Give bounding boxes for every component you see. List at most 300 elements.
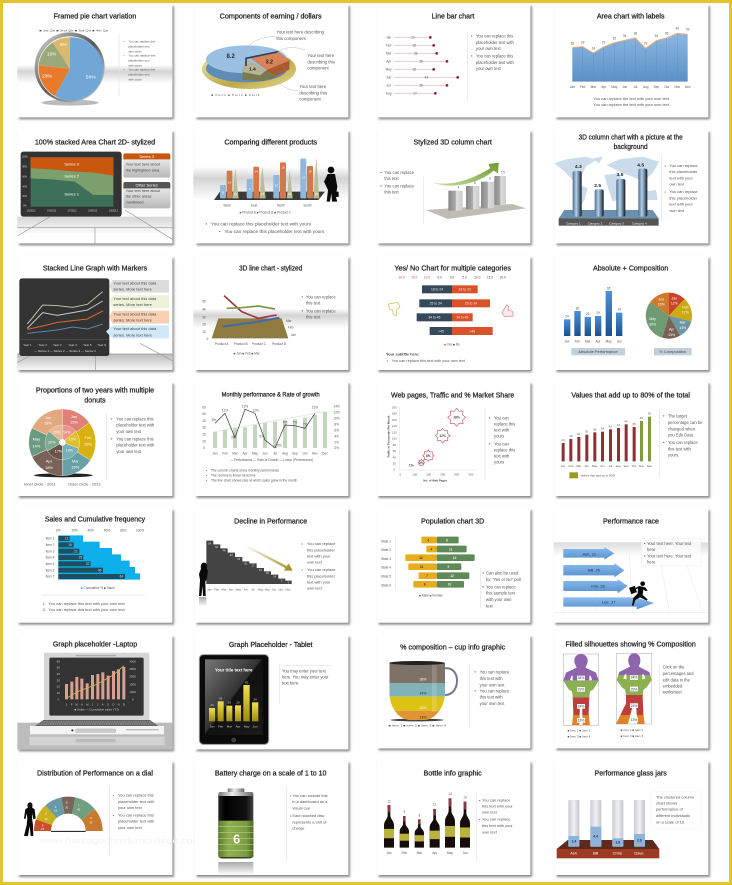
text block: tablet: text here. <box>282 680 299 685</box>
text block: callouts <box>276 30 335 102</box>
chart: glass jars: 2.4 <box>572 839 576 843</box>
chart: laptop columns: 0 <box>57 697 59 701</box>
chart: combo bars and line: 13% <box>312 406 318 410</box>
chart: area: Oct <box>664 85 669 89</box>
chart: area: 29 <box>644 42 648 46</box>
chart: bubble scatter: 400 <box>454 473 459 477</box>
chart: area: Mar <box>591 85 596 89</box>
text block: column with picture: own text <box>669 182 685 187</box>
chart: descending stairs: Oct <box>272 588 276 592</box>
chart: stacked area <box>21 152 122 217</box>
panel: absolute plus composition <box>555 256 708 370</box>
chart: cumulative stair bars: Item 7 <box>46 575 55 579</box>
icon: battery <box>218 788 253 875</box>
chart: dial: D <box>66 800 68 804</box>
chart: line bars: Aug <box>386 91 392 95</box>
chart: bubble scatter: 500 <box>469 473 474 477</box>
chart: area: 29 <box>602 41 606 45</box>
panel: components of earning <box>195 4 348 117</box>
text block: web pages: • <box>489 441 491 446</box>
chart: dial: 9 <box>90 816 92 820</box>
chart: stacked lines: Year 3 <box>53 343 62 347</box>
chart: population pyramid: State 4 <box>381 566 391 570</box>
chart: bubble scatter: 300 <box>440 473 445 477</box>
chart: donut wheel: 14% <box>63 431 71 435</box>
chart: stacked lines <box>19 278 109 356</box>
chart: 3D line: 50 <box>202 300 206 304</box>
chart: glass jars <box>557 800 659 858</box>
chart: pareto columns: Apr <box>584 464 589 468</box>
text block: 3D column left: • <box>380 170 382 175</box>
text block: population: Can also be used <box>486 571 519 576</box>
chart: composition pie: Feb <box>682 305 688 309</box>
chart: bottles: 12 <box>387 799 391 803</box>
text block: decline: You can replace <box>307 541 336 546</box>
chart: 3D columns: 5 <box>474 181 476 185</box>
chart: stacked area: 1/9/2012 <box>109 211 119 213</box>
text block: dial: your own text <box>118 805 143 810</box>
callouts: series notes: Your text about this data <box>113 311 157 316</box>
chart: population pyramid: 7 <box>426 574 428 578</box>
text block: values 80: • <box>663 440 665 445</box>
callouts: series notes <box>106 280 169 338</box>
chart: donut wheel: Feb <box>85 435 92 440</box>
chart: area <box>570 27 691 89</box>
watermark: www.heritagechristiancollege.com <box>39 835 202 845</box>
device: tablet: Jan <box>210 725 215 729</box>
text block: decline: own text <box>307 560 323 565</box>
chart: diverging bars: 15.0 <box>411 276 418 280</box>
text block: cup: this text with <box>480 695 503 700</box>
text block: 3D line <box>302 295 336 319</box>
chart: population pyramid: 11 <box>420 565 424 569</box>
chart: pareto columns: Dec <box>647 464 652 468</box>
icon: thumb down <box>389 302 400 316</box>
panel: battery charge <box>195 761 348 875</box>
chart: combo bars and line: 20 <box>202 432 206 436</box>
text block: web pages: text with <box>494 428 510 433</box>
text block: population <box>482 571 521 608</box>
chart: donut wheel: Jan <box>71 414 77 419</box>
device: tablet: May <box>244 725 250 729</box>
chart: pareto columns: 39 <box>601 427 604 431</box>
chart: cumulative stair bars: 80% <box>120 528 127 532</box>
chart: race arrows: Kim, 26 <box>591 583 606 588</box>
chart: cumulative stair bars: 32 <box>86 562 90 566</box>
chart: composition pie: Jan <box>672 296 677 300</box>
chart: column and cone: North <box>277 203 285 207</box>
text block: population: • <box>482 584 484 589</box>
text block: cup: your own text <box>480 682 505 687</box>
caption: donut years: Inner circle - 2011 <box>24 482 56 487</box>
chart: bottles: Jun <box>462 851 468 855</box>
panel: decline in performance <box>195 508 348 623</box>
chart: bubble scatter: 80 <box>393 443 396 447</box>
chart: cylinders: Category 3 <box>609 221 624 225</box>
chart: dial: 7 <box>78 804 80 808</box>
chart: dial: 8 <box>45 812 47 816</box>
chart: stacked area: 20% <box>22 196 27 198</box>
chart: cumulative stair bars: 12 <box>65 537 69 541</box>
chart: male silhouette: 23% <box>578 688 584 692</box>
chart: combo bars and line: 3% <box>231 435 236 439</box>
chart: descending stairs: Sep <box>265 588 270 592</box>
text block: comparing products <box>206 222 324 234</box>
chart: line bars: Mar <box>386 51 391 55</box>
device: laptop <box>29 653 165 745</box>
chart: descending stairs: Dec <box>285 588 291 592</box>
chart: 3D pie: 1.4 <box>249 66 256 72</box>
chart: bubble scatter: 40 <box>393 455 396 459</box>
text block: 3D line: • <box>302 308 304 313</box>
chart: framed pie: 9% <box>60 42 67 47</box>
chart: bubble scatter: 0 <box>400 473 402 477</box>
chart: descending stairs: Mar <box>222 588 226 592</box>
chart: line bars: May <box>386 67 392 71</box>
chart: population pyramid: ■ Male ■ Female <box>419 594 443 598</box>
chart: descending stairs: 46 <box>222 548 226 552</box>
arrow: decline <box>246 545 293 571</box>
chart: 3D line: 10 <box>202 330 206 334</box>
chart: descending stairs <box>206 541 292 592</box>
icon: cup chart: 38% <box>420 678 426 682</box>
chart: combo bars and line: 14% <box>333 405 340 409</box>
text block: cup: You can replace <box>480 670 510 675</box>
chart: cumulative stair bars: 64 <box>120 575 123 579</box>
chart: column and cone: South <box>303 203 312 207</box>
chart: laptop columns: S <box>107 703 109 707</box>
chart: diverging bars: 20.0 <box>500 276 506 280</box>
chart: line bars: 28 <box>414 51 418 55</box>
chart: line bars: 26 <box>413 43 416 47</box>
chart: donut wheel: 17% <box>55 450 63 454</box>
text block: bottle: own text <box>482 810 498 815</box>
heading: absolute composition: Absolute + Composition <box>593 263 668 272</box>
panel: monthly performance <box>195 382 348 496</box>
text block: donuts <box>111 417 155 454</box>
text block: cup: • <box>474 670 476 675</box>
legend: values 80 <box>569 472 615 478</box>
chart: bubble scatter: No. of Web Pages <box>423 478 448 482</box>
chart: column and cone: 19 <box>302 175 305 179</box>
icon: businessman silhouette <box>324 167 339 202</box>
chart: bottles: Mar <box>417 851 422 855</box>
chart: 3D line: Product B <box>234 342 248 346</box>
chart: column and cone: 18 <box>308 170 312 174</box>
text block: silhouettes: Click on the <box>663 665 685 670</box>
heading: population: Population chart 3D <box>421 516 484 525</box>
chart: bottles <box>384 792 470 855</box>
chart: laptop columns <box>57 659 136 712</box>
heading: line bar: Line bar chart <box>432 11 474 20</box>
device: tablet: 28 <box>228 701 231 705</box>
chart: cumulative stair bars: Item 2 <box>46 543 55 547</box>
icon: man silhouette <box>199 563 208 606</box>
heading: stacked area: 100% stacked Area Chart 2D- stylized <box>35 137 155 146</box>
chart: glass jars: Bill <box>593 851 598 856</box>
chart: donut wheel: 20% <box>48 440 56 444</box>
caption: donut years: Outer circle - 2012 <box>68 482 102 487</box>
panel: stylized 3D column <box>377 130 530 243</box>
chart: area: Apr <box>601 85 606 89</box>
panel: yes no chart <box>377 256 530 370</box>
chart: donut wheel: 19% <box>66 448 74 452</box>
text block: bottle: this text with your <box>482 804 513 809</box>
text block: glass jars: The clustered column <box>656 794 694 799</box>
text block: line bar <box>471 34 515 71</box>
text block: framed pie: You can replace this <box>128 54 156 58</box>
panel: performance glass jars <box>555 761 708 875</box>
chart: laptop columns: ■ Sales — Cumulative sales YTD <box>75 708 120 712</box>
chart: 3D line: ■ Jan ■ Feb ■ Mar <box>234 352 260 356</box>
chart: stacked lines: Year 5 <box>83 343 92 347</box>
chart: pareto columns: Feb <box>569 464 574 468</box>
heading: column with picture: 3D column chart with a picture at the <box>579 133 683 142</box>
heading: race: Performance race <box>603 516 659 525</box>
chart: column and cone: 18 <box>281 165 285 169</box>
callouts: series notes: Your text about this data <box>113 326 157 331</box>
text block: column with picture <box>664 163 699 213</box>
chart: pareto columns: Mar <box>576 464 581 468</box>
chart: 3D line: 30 <box>202 315 206 319</box>
heading: laptop: Graph placeholder -Laptop <box>53 640 137 649</box>
chart: population pyramid: 9 <box>424 583 426 587</box>
text block: race: Your text here. Your text <box>647 541 692 546</box>
text block: tablet: here. You may enter your <box>282 674 329 679</box>
chart: diverging bars: 10.0 <box>424 276 430 280</box>
chart: diverging bars: 34 to 45 <box>428 316 440 320</box>
chart: laptop columns: O <box>112 703 115 707</box>
chart: combo bars and line: 7% <box>293 421 297 425</box>
chart: bubble scatter: 120 <box>392 430 397 434</box>
icon: cup chart: 24% <box>420 692 426 696</box>
chart: population pyramid: State 5 <box>381 575 391 579</box>
chart: combo bars and line: Sep <box>292 451 298 455</box>
text block: yes no <box>386 353 466 363</box>
chart: line bars: 35 <box>419 83 423 87</box>
chart: bottles: Feb <box>402 851 407 855</box>
chart: column and cone: 9 <box>249 187 251 191</box>
chart: area: 36 <box>665 32 669 36</box>
callout: series 3: Your text here about <box>126 163 161 167</box>
chart: cumulative stair bars: Item 4 <box>46 556 55 560</box>
chart: descending stairs: 27 <box>251 564 255 568</box>
heading: monthly performance: Monthly performance & Rate of growth <box>222 392 320 399</box>
chart: combo bars and line: 12% <box>333 411 340 415</box>
chart: bottles: 9 <box>403 810 405 814</box>
chart: composition pie: Mar <box>680 320 686 324</box>
chart: 3D pie: 3.2 <box>266 60 273 66</box>
chart: combo bars and line: 2% <box>334 440 339 444</box>
chart: laptop columns: J <box>97 703 99 707</box>
chart: cylinders: 4.5 <box>637 162 644 168</box>
text block: column with picture: own text <box>669 208 685 213</box>
chart: column: Jan <box>564 339 570 343</box>
chart: composition pie: 30% <box>649 323 656 327</box>
legend: cup: ■ Item 1 ■ Item 2 ■ Item 3 ■ Item 4 <box>389 724 446 728</box>
chart: cumulative stair bars: 100% <box>136 528 144 532</box>
chart: diverging bars: 18 to 24 <box>431 288 443 292</box>
chart: stacked area: Series 3 <box>64 162 80 167</box>
chart: column and cone: 14 <box>228 180 231 184</box>
heading: silhouettes: Filled silhouettes showing % Composition <box>565 639 696 648</box>
chart: laptop columns: A <box>81 703 83 707</box>
legend: silhouettes: ■ Item 1 ■ Item 2 <box>621 728 644 732</box>
chart: 3D columns: 7.5 <box>500 170 505 174</box>
chart: pareto columns: Jun <box>600 464 605 468</box>
chart: bubble scatter: 12% <box>439 434 446 438</box>
device: tablet: Apr <box>236 725 240 729</box>
device: tablet: 34 <box>253 697 257 701</box>
chart: line bars: Jun <box>386 75 391 79</box>
text block: monthly performance <box>206 468 298 483</box>
text block: cup: your own text <box>480 701 505 706</box>
chart: pareto columns: 53 <box>640 416 643 420</box>
heading: yes no: Yes/ No Chart for multiple categories <box>394 263 511 272</box>
chart: pareto columns: 59 <box>648 412 651 416</box>
chart: bubble scatter: 60 <box>393 449 396 453</box>
chart: stacked lines: Year 6 <box>97 343 106 347</box>
chart: diverging bars: 25 to 34 <box>465 302 477 306</box>
panel: cup info graphic <box>377 635 530 748</box>
chart: race arrows: Ash, 21 <box>583 551 597 556</box>
chart: descending stairs: 3 <box>288 580 290 584</box>
text block: line bar: placeholder text with <box>476 40 515 45</box>
text block: values 80: this text with <box>668 446 692 451</box>
chart: laptop columns: 0 <box>132 697 134 701</box>
callouts: series notes: series. More text here <box>113 332 153 337</box>
chart: descending stairs: 30 <box>244 561 248 565</box>
chart: dial: 14 <box>45 817 48 821</box>
chart: donut wheel: Jun <box>45 415 51 420</box>
panel: line bar chart <box>377 4 530 117</box>
chart: dial: 40 <box>77 808 81 812</box>
chart: stacked lines: Year 2 <box>38 343 47 347</box>
text block: glass jars <box>651 792 701 828</box>
chart: pareto columns: 35 <box>585 430 589 434</box>
chart: combo bars and line: 7% <box>303 423 307 427</box>
text block: callouts: Your text here <box>307 53 335 58</box>
heading: web pages: Web pages, Traffic and % Market Share <box>391 390 514 399</box>
chart: glass jars: Ash <box>570 851 577 856</box>
text block: donuts: your own text <box>116 429 142 434</box>
chart: area: 28 <box>571 42 574 46</box>
panel: laptop graph <box>17 635 172 749</box>
chart: bottles: Jan <box>386 851 392 855</box>
panel: population chart <box>377 508 530 623</box>
chart: donut wheel: 18% <box>44 421 52 426</box>
text block: web pages: You can <box>494 415 510 420</box>
text block: framed pie: placeholder text <box>128 72 150 76</box>
text block: cup <box>474 670 510 706</box>
chart: area: 39 <box>686 28 690 32</box>
chart: descending stairs: Aug <box>258 588 263 592</box>
icon: runner with briefcase <box>629 581 648 606</box>
heading: values 80: Values that add up to 80% of the total <box>571 390 690 399</box>
text block: cumulative: You can replace this text with your own text <box>48 601 125 606</box>
text block: comparing products: You can replace this placeholder text with yours <box>211 222 311 227</box>
text block: tablet: You may enter your text <box>282 668 327 673</box>
heading: decline: Decline in Performance <box>234 516 307 525</box>
chart: bubble scatter: 1% <box>409 463 414 467</box>
chart: descending stairs: 14 <box>273 575 277 579</box>
text block: monthly performance: The line chart shows rate at which sales grew in the month <box>211 479 298 483</box>
chart: combo bars and line: Jan <box>212 451 218 455</box>
chart: column and cone: 14 <box>288 192 292 196</box>
chart: cumulative stair bars: ■ Cumulative % ■ Sales <box>81 586 115 590</box>
heading: bottle: Bottle info graphic <box>423 768 482 777</box>
chart: bubble scatter: 180 <box>392 412 397 416</box>
chart: bottles: 8 <box>418 814 420 818</box>
chart: bubble scatter: 16% <box>453 416 460 420</box>
text block: dial: your own text <box>118 825 143 830</box>
chart: composition pie: May <box>649 317 656 321</box>
chart: donut wheel: Apr <box>46 459 53 464</box>
chart: line bars: 26 <box>413 67 416 71</box>
text block: framed pie: with yours <box>128 63 142 67</box>
chart: population pyramid: 10 <box>448 583 451 587</box>
text block: callouts: component <box>307 66 330 71</box>
panel: 100% stacked area <box>17 130 172 243</box>
chart: line bars: 35 <box>419 59 423 63</box>
chart: area: Jun <box>622 85 627 89</box>
legend: silhouettes: ■ Item 3 ■ Item 4 <box>568 735 591 739</box>
legend: silhouettes <box>568 728 644 739</box>
chart: pareto columns: Oct <box>632 464 636 468</box>
chart: dial: 32 <box>90 820 93 824</box>
map: world <box>554 157 659 208</box>
chart: dial: 20 <box>65 805 69 809</box>
chart: population pyramid: 12 <box>450 574 454 578</box>
chart: female silhouette: 29% <box>631 687 637 691</box>
chart: combo bars and line: Apr <box>243 451 247 455</box>
text block: values 80: You can replace <box>668 440 698 445</box>
chart: area: 40 <box>676 27 679 31</box>
text block: framed pie: placeholder text <box>128 44 150 48</box>
chart: 3D pie: 8.2 <box>227 54 235 60</box>
chart: population pyramid: State 6 <box>381 583 391 587</box>
text block: column with picture: text with your <box>669 202 693 207</box>
chart: descending stairs: 50 <box>215 545 219 549</box>
chart: diverging bars: ■ Yes ■ No <box>444 342 460 346</box>
chart: diverging bars: 5.0 <box>437 276 442 280</box>
text block: values 80: yours. <box>668 453 679 458</box>
text block: framed pie: • <box>123 40 124 44</box>
chart: column: 29 <box>596 311 600 315</box>
chart: donut wheel: Mar <box>72 458 79 463</box>
chart: bubble scatter: 140 <box>392 424 397 428</box>
label: percent composition <box>654 348 692 355</box>
chart: combo bars and line: 5% <box>259 435 264 439</box>
text block: 3D column left: this text <box>384 176 400 181</box>
text block: donuts: You can replace this <box>116 417 154 422</box>
chart: laptop columns: J <box>92 703 94 707</box>
chart: line bars: 23 <box>411 35 415 39</box>
text block: glass jars: chart shows <box>656 800 677 805</box>
text block: cup: • <box>474 688 476 693</box>
chart: cylinders: 4.3 <box>575 164 582 170</box>
text block: yes no: Your subtitle here: <box>386 353 420 357</box>
chart: descending stairs: May <box>236 588 242 592</box>
chart: pareto columns: 38 <box>593 427 597 431</box>
label: absolute performance: Absolute Performance <box>578 349 618 354</box>
chart: glass jars: Dave <box>634 851 644 856</box>
chart: combo bars and line: 8% <box>334 422 339 426</box>
chart: combo bars and line: Feb <box>222 451 228 455</box>
icon: battery: 6 <box>233 832 240 846</box>
chart: cumulative stair bars: 46 <box>98 568 102 572</box>
text block: population: text <box>486 603 494 608</box>
